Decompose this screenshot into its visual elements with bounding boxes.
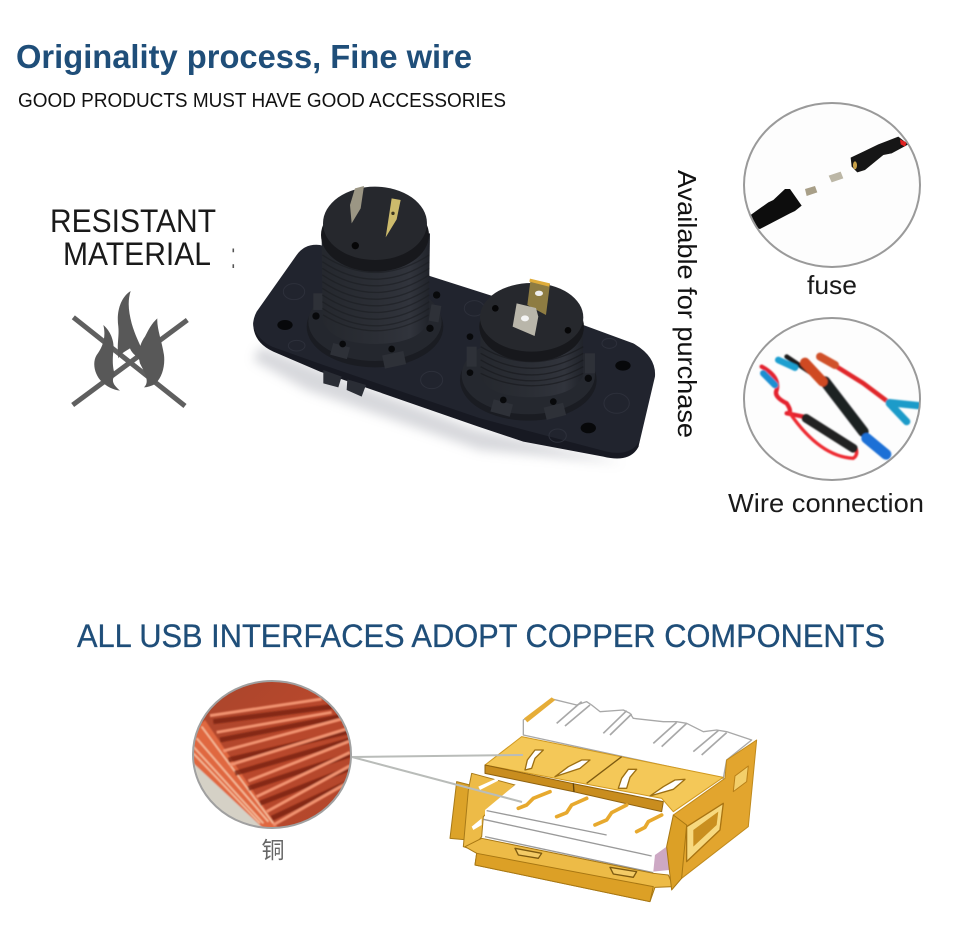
threaded body [480,327,583,397]
photo: dual socket panel [253,186,655,463]
flange [460,339,597,421]
plate shadow [253,347,623,463]
wire photo circle [744,318,920,480]
mounting plate [253,245,655,456]
clips [323,370,366,397]
callout: wire connection [728,318,924,518]
lower yellow tray [465,838,673,902]
right column [667,815,687,890]
copper sheets photo [192,681,351,832]
large socket [307,186,443,369]
label: wire connection: Wire connection [728,488,924,518]
icon: crossed-out flame [73,291,187,406]
label: fuse: fuse [807,270,857,300]
front bar [485,765,663,812]
slots in top [525,750,685,796]
silver blade [513,303,538,336]
pointer lines [352,755,523,802]
gold blade [527,279,550,315]
heading: resistant material: : [231,236,236,277]
heading: resistant material: MATERIAL [63,236,211,272]
subtitle: GOOD PRODUCTS MUST HAVE GOOD ACCESSORIES [18,90,506,112]
right side wall [673,740,757,878]
contacts [518,792,662,832]
white tongue [485,810,667,872]
small socket [460,279,597,421]
fuse photo circle [744,103,920,267]
plate holes and dimples [277,284,631,442]
callout: fuse [744,103,920,300]
inner cavity [485,785,673,847]
heading: resistant material [50,203,236,277]
left flap and frame [450,782,470,840]
top yellow face [485,737,723,812]
threaded body [322,233,430,344]
vertical label: Available for purchase [672,170,702,438]
diagram: USB connector [450,697,757,902]
top face [321,198,429,272]
flange [307,286,443,367]
title: Originality process, Fine wire [16,38,472,75]
section heading: copper components: ALL USB INTERFACES ADOPT COPPER COMPONENTS [77,618,885,654]
blades [350,186,364,223]
top white housing [523,699,752,778]
heading: resistant material: RESISTANT [50,203,216,239]
top face [479,292,584,362]
label: copper: 铜 [262,837,284,863]
